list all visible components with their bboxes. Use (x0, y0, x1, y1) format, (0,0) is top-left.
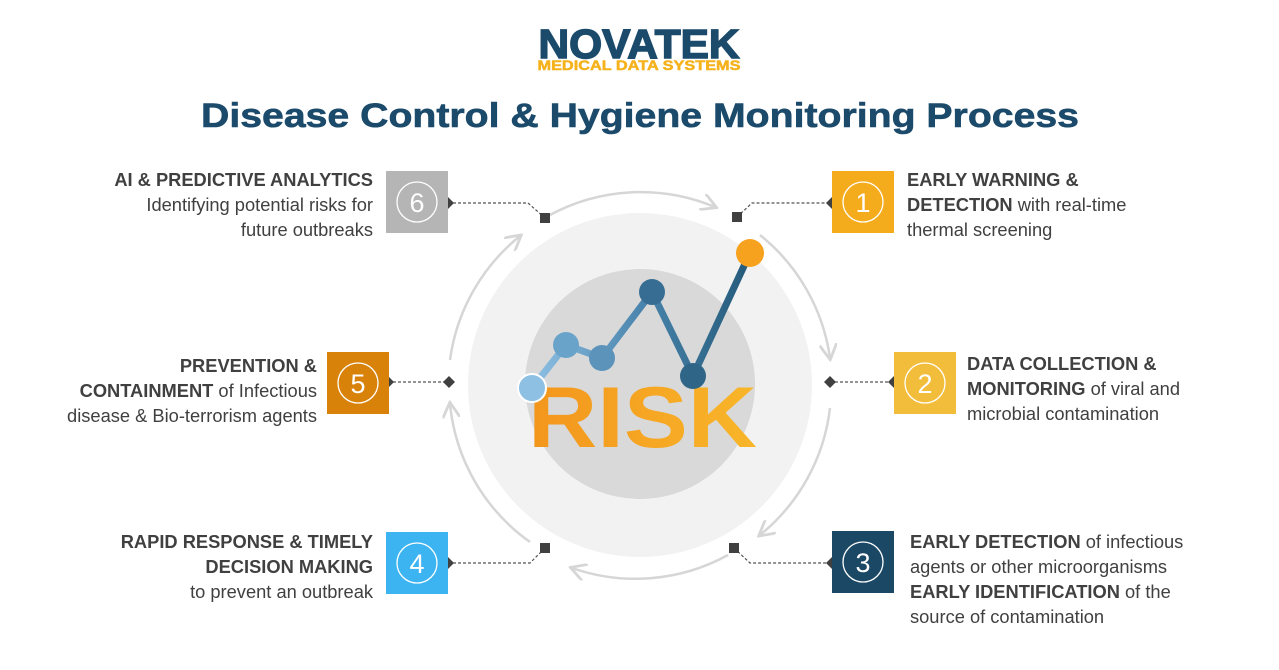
step 3: EARLY IDENTIFICATION of the (910, 581, 1171, 602)
logo: NOVATEK (538, 21, 740, 67)
step 1: DETECTION with real-time (907, 194, 1126, 215)
step 2: microbial contamination (967, 403, 1159, 424)
step 6 (114, 169, 448, 240)
step 6: AI & PREDICTIVE ANALYTICS (114, 169, 373, 190)
central risk graphic (468, 213, 812, 557)
step 1: thermal screening (907, 219, 1052, 240)
logo: MEDICAL DATA SYSTEMS (538, 57, 740, 73)
step 5: CONTAINMENT of Infectious (80, 380, 317, 401)
step 2: DATA COLLECTION & (967, 353, 1157, 374)
step 3: agents or other microorganisms (910, 556, 1167, 577)
step 2: 2 (917, 369, 933, 399)
step 6: Identifying potential risks for (146, 194, 373, 215)
step 1 (832, 169, 1126, 240)
connectors (388, 203, 894, 563)
step 4: RAPID RESPONSE & TIMELY (121, 531, 373, 552)
step 6: 6 (409, 188, 425, 218)
step 2: MONITORING of viral and (967, 378, 1180, 399)
cycle arrows (450, 192, 830, 579)
step 5 (67, 352, 389, 426)
step 3: 3 (855, 548, 871, 578)
step 5: 5 (350, 369, 366, 399)
central risk graphic: RISK (528, 370, 757, 466)
step 2 (894, 352, 1180, 424)
step 3 (832, 531, 1183, 627)
step 1: EARLY WARNING & (907, 169, 1079, 190)
step 1: 1 (855, 188, 871, 218)
step 3: source of contamination (910, 606, 1104, 627)
step 5: disease & Bio-terrorism agents (67, 405, 317, 426)
step 4: to prevent an outbreak (190, 581, 374, 602)
step 3: EARLY DETECTION of infectious (910, 531, 1183, 552)
step 4 (121, 531, 448, 602)
step 4: DECISION MAKING (205, 556, 373, 577)
step 5: PREVENTION & (180, 355, 317, 376)
title: Disease Control & Hygiene Monitoring Process (201, 97, 1079, 135)
step 4: 4 (409, 549, 425, 579)
step 6: future outbreaks (241, 219, 373, 240)
